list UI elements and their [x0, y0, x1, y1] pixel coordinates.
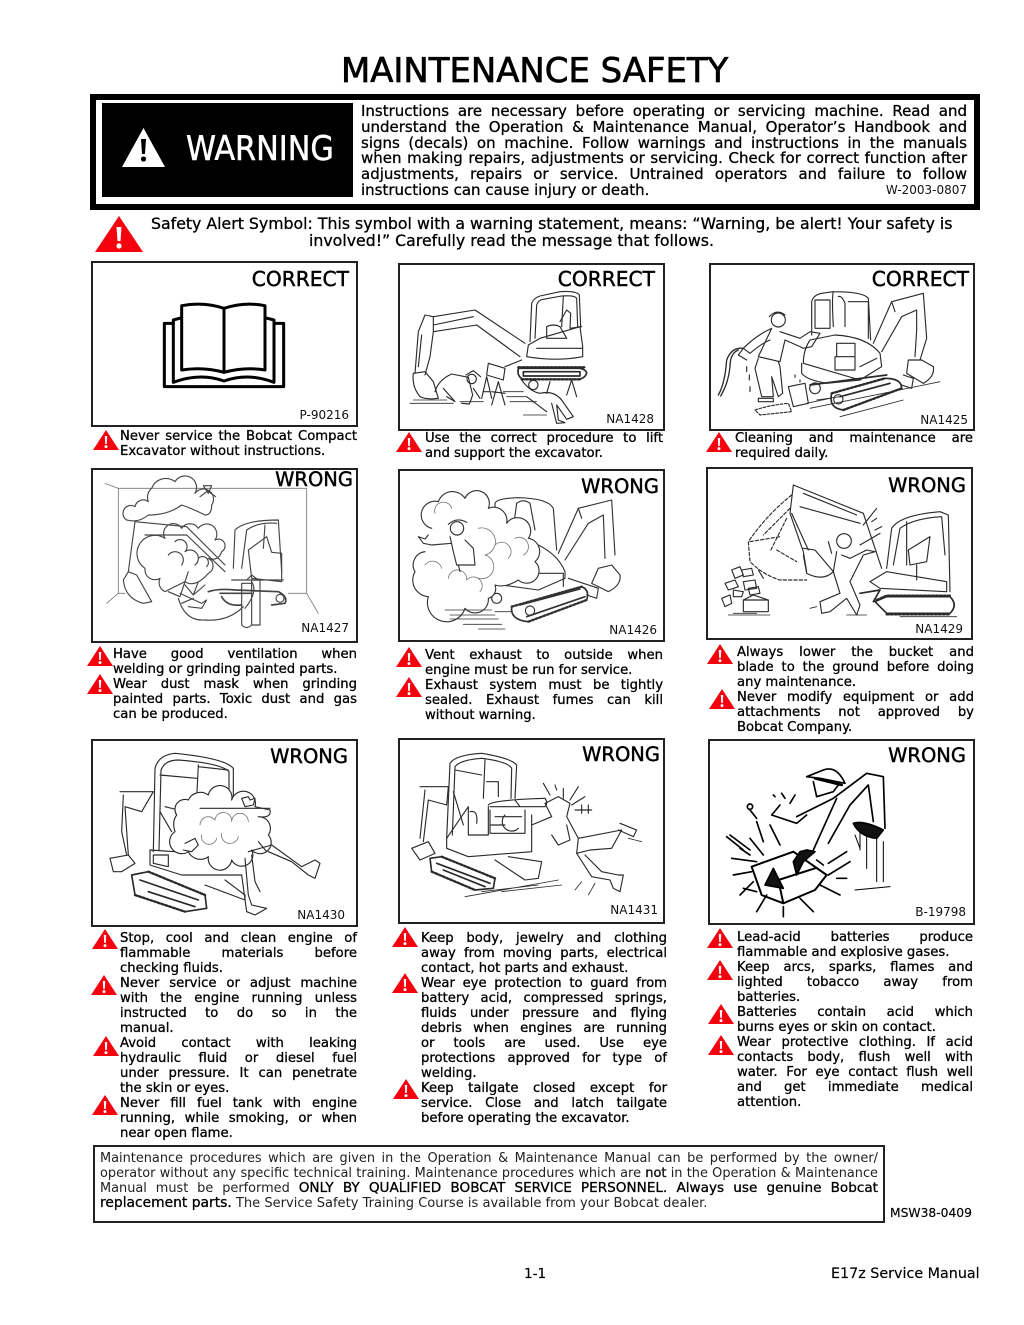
label: correct: CORRECT [252, 267, 349, 291]
illustration: bucket falling on worker [721, 484, 958, 618]
icon: safety alert symbol [95, 216, 143, 252]
text: battery warnings: attention. [737, 1095, 801, 1110]
text: lift and support [425, 431, 663, 461]
icon: alert triangle [93, 1036, 119, 1056]
label: wrong: WRONG [275, 468, 353, 491]
text: ventilation and dust mask: welding or grinding painted parts. [113, 662, 337, 676]
text: lower bucket and no modifications: Never modify equipment or add [737, 690, 974, 704]
icon: alert triangle [393, 1079, 419, 1099]
warning body text: Instructions are necessary before operating or servicing machine. Read and [361, 102, 967, 120]
text: moving parts and eye protection: fluids under pressure and flying [421, 1006, 667, 1021]
icon: open book [162, 302, 286, 388]
warning body text: when making repairs, adjustments or servicing. Check for correct function after [361, 149, 967, 167]
text: engine and fuel warnings: manual. [120, 1021, 174, 1036]
panel: correct, cleaning [709, 263, 975, 431]
figure code: NA1430 [297, 908, 345, 922]
panel: wrong, moving parts [398, 738, 665, 924]
text: lower bucket and no modifications: attachments not approved by [737, 704, 974, 720]
panel: wrong, raised bucket falling [706, 467, 973, 640]
panel: warning banner [90, 94, 980, 210]
icon: alert triangle [87, 646, 113, 666]
text: ventilation and dust mask: Wear dust mask when grinding [113, 676, 357, 692]
text: exhaust venting: engine must be run for service. [425, 662, 632, 678]
icon: alert triangle [93, 430, 119, 450]
text: exhaust venting: sealed. Exhaust fumes can kill [425, 692, 663, 708]
text: lift and support: and support the excavator. [425, 446, 603, 461]
warning body text [361, 102, 968, 199]
warning heading: WARNING [186, 129, 334, 168]
figure code: B-19798 [915, 905, 966, 919]
text: lower bucket and no modifications: Always lower the bucket and [737, 644, 974, 660]
text: exhaust venting: without warning. [425, 708, 536, 722]
text: battery warnings: Wear protective clothing. If acid [737, 1035, 973, 1050]
text: engine and fuel warnings: Stop, cool and clean engine of [120, 931, 357, 946]
warning label block [102, 103, 353, 197]
text: cleaning and maintenance [735, 431, 973, 461]
note text: replacement parts. The Service Safety Training Course is available from your Bobcat dealer. [100, 1195, 707, 1211]
text: battery warnings: burns eyes or skin on contact. [737, 1020, 936, 1035]
text: battery warnings [737, 930, 973, 1110]
text: engine and fuel warnings: checking fluids. [120, 961, 223, 976]
safety alert statement: Safety Alert Symbol: This symbol with a warning statement, means: “Warning, be alert! Your safety is [151, 214, 952, 233]
panel: wrong, hot engine burn [91, 739, 358, 927]
text: battery warnings: batteries. [737, 990, 800, 1005]
text: never service without instructions: Excavator without instructions. [120, 444, 325, 458]
text: engine and fuel warnings: under pressure. It can penetrate [120, 1066, 357, 1081]
text: moving parts and eye protection: before operating the excavator. [421, 1111, 630, 1126]
icon: alert triangle [92, 1095, 118, 1115]
icon: alert triangle [708, 1035, 734, 1055]
text: engine and fuel warnings: Never fill fuel tank with engine [120, 1096, 357, 1111]
note text: Maintenance procedures which are given in the Operation & Maintenance Manual can be performed by the owner/ [100, 1151, 878, 1166]
safety alert statement: involved!” Carefully read the message that follows. [309, 231, 714, 250]
figure code: NA1425 [920, 413, 968, 427]
text: engine and fuel warnings: Avoid contact with leaking [120, 1036, 357, 1051]
icon: alert triangle [396, 647, 422, 667]
icon: alert triangle [92, 929, 118, 949]
icon: alert triangle [708, 1004, 734, 1024]
text: engine and fuel warnings: the skin or eyes. [120, 1081, 229, 1096]
text: battery warnings: contacts body, flush well with [737, 1050, 973, 1065]
figure code: P-90216 [300, 408, 349, 422]
panel: correct, lift and support [398, 263, 665, 431]
warning body text: understand the Operation & Maintenance Manual, Operator’s Handbook and [361, 118, 967, 136]
text: lower bucket and no modifications: Bobcat Company. [737, 720, 852, 734]
figure code: NA1427 [301, 621, 349, 635]
text: exhaust venting [424, 648, 663, 722]
text: battery warnings: lighted tobacco away from [737, 975, 973, 990]
illustration: welding smoke around excavator [104, 475, 319, 628]
text: engine and fuel warnings: hydraulic fluid or diesel fuel [120, 1051, 357, 1066]
text: battery warnings: water. For eye contact flush well [737, 1065, 973, 1080]
text: ventilation and dust mask: Have good ventilation when [113, 646, 357, 662]
warning code: W-2003-0807 [886, 183, 967, 197]
illustration: worker in exhaust cloud [412, 490, 621, 630]
text: engine and fuel warnings: flammable materials before [120, 946, 357, 961]
text: engine and fuel warnings: instructed to do so in the [120, 1006, 357, 1021]
text: engine and fuel warnings: Never service or adjust machine [120, 976, 357, 991]
panel: wrong, exhaust in enclosed space [398, 469, 665, 642]
text: lower bucket and no modifications [736, 644, 974, 734]
figure code: NA1428 [606, 412, 654, 426]
text: battery warnings: Keep arcs, sparks, flames and [737, 960, 973, 975]
icon: alert triangle [709, 689, 735, 709]
panel: wrong, welding without ventilation [91, 468, 358, 643]
warning body text: signs (decals) on machine. Follow warnings and instructions in the manuals [361, 134, 967, 152]
icon: alert triangle [87, 674, 113, 694]
text: moving parts and eye protection: contact, hot parts and exhaust. [421, 961, 628, 976]
icon: alert triangle [706, 432, 732, 452]
label: wrong: WRONG [888, 474, 966, 497]
icon: alert triangle [91, 975, 117, 995]
icon: alert triangle [392, 973, 418, 993]
text: engine and fuel warnings: near open flame. [120, 1126, 233, 1141]
text: moving parts and eye protection: away from moving parts, electrical [421, 946, 667, 961]
text: ventilation and dust mask [113, 646, 357, 722]
note text: Manual must be performed ONLY BY QUALIFIED BOBCAT SERVICE PERSONNEL. Always use genuine Bobcat [100, 1180, 878, 1196]
icon: alert triangle [396, 432, 422, 452]
safety alert statement [151, 214, 952, 250]
manual name: E17z Service Manual [831, 1266, 980, 1282]
panel: correct, read the manual [91, 261, 358, 427]
illustration: worker thrown from engine [411, 752, 642, 898]
text: battery warnings: Batteries contain acid which [737, 1005, 973, 1020]
text: lift and support: Use the correct procedure to lift [425, 431, 663, 446]
illustration: exploding battery [726, 768, 890, 918]
text: cleaning and maintenance: Cleaning and maintenance are [735, 431, 973, 446]
text: engine and fuel warnings: with the engine running unless [120, 991, 357, 1006]
text: exhaust venting: Exhaust system must be tightly [425, 678, 663, 692]
icon: alert triangle [707, 644, 733, 664]
label: wrong: WRONG [581, 475, 659, 498]
figure code: NA1426 [609, 623, 657, 637]
text: battery warnings: Lead-acid batteries produce [737, 930, 973, 945]
text: moving parts and eye protection: Keep body, jewelry and clothing [421, 931, 667, 946]
icon: alert triangle [707, 928, 733, 948]
icon: alert triangle [707, 960, 733, 980]
document code: MSW38-0409 [890, 1206, 972, 1220]
text: battery warnings: flammable and explosive gases. [737, 945, 949, 960]
text: never service without instructions [120, 428, 357, 458]
warning body text: instructions can cause injury or death. [361, 181, 649, 199]
text: ventilation and dust mask: painted parts. Toxic dust and gas [113, 692, 357, 706]
figure code: NA1431 [610, 903, 658, 917]
text: moving parts and eye protection: service. Close and latch tailgate [421, 1096, 667, 1111]
text: engine and fuel warnings: running, while smoking, or when [120, 1111, 357, 1126]
illustration: excavator on stands with workers [410, 290, 588, 424]
text: exhaust venting: Vent exhaust to outside when [425, 648, 663, 662]
text: engine and fuel warnings [120, 931, 358, 1141]
label: wrong: WRONG [582, 743, 660, 766]
text: moving parts and eye protection: welding. [421, 1066, 477, 1081]
text: moving parts and eye protection: Keep tailgate closed except for [421, 1081, 667, 1096]
figure code: NA1429 [915, 622, 963, 636]
text: lower bucket and no modifications: any maintenance. [737, 674, 856, 690]
text: cleaning and maintenance: required daily. [735, 446, 828, 461]
label: correct: CORRECT [558, 267, 655, 291]
note text [100, 1151, 878, 1211]
text: battery warnings: and get immediate medical [737, 1080, 973, 1095]
text: moving parts and eye protection: protections approved for type of [421, 1051, 667, 1066]
icon: white warning triangle [122, 128, 165, 167]
text: never service without instructions: Never service the Bobcat Compact [120, 428, 357, 444]
text: moving parts and eye protection: Wear eye protection to guard from [421, 976, 667, 991]
icon: alert triangle [392, 927, 418, 947]
text: moving parts and eye protection: debris when engines are running [421, 1021, 667, 1036]
note text: operator without any specific technical training. Maintenance procedures which are not in the Operation & Maintenance [100, 1166, 878, 1181]
panel: maintenance procedures note [93, 1145, 885, 1223]
text: moving parts and eye protection [421, 931, 668, 1126]
page number: 1-1 [524, 1266, 546, 1282]
text: lower bucket and no modifications: blade to the ground before doing [737, 660, 974, 674]
label: correct: CORRECT [872, 267, 969, 291]
illustration: worker washing excavator [718, 291, 940, 418]
title: MAINTENANCE SAFETY [341, 51, 728, 90]
text: ventilation and dust mask: can be produced. [113, 706, 228, 722]
label: wrong: WRONG [270, 745, 348, 768]
panel: wrong, battery explosion [708, 739, 975, 925]
text: moving parts and eye protection: or tools are used. Use eye [421, 1036, 667, 1051]
warning body text: adjustments, repairs or service. Untrained operators and failure to follow [361, 165, 967, 183]
text: moving parts and eye protection: battery acid, compressed springs, [421, 991, 667, 1006]
label: wrong: WRONG [888, 744, 966, 767]
illustration: worker thrown back by hot fluid [109, 752, 321, 916]
icon: alert triangle [396, 677, 422, 697]
